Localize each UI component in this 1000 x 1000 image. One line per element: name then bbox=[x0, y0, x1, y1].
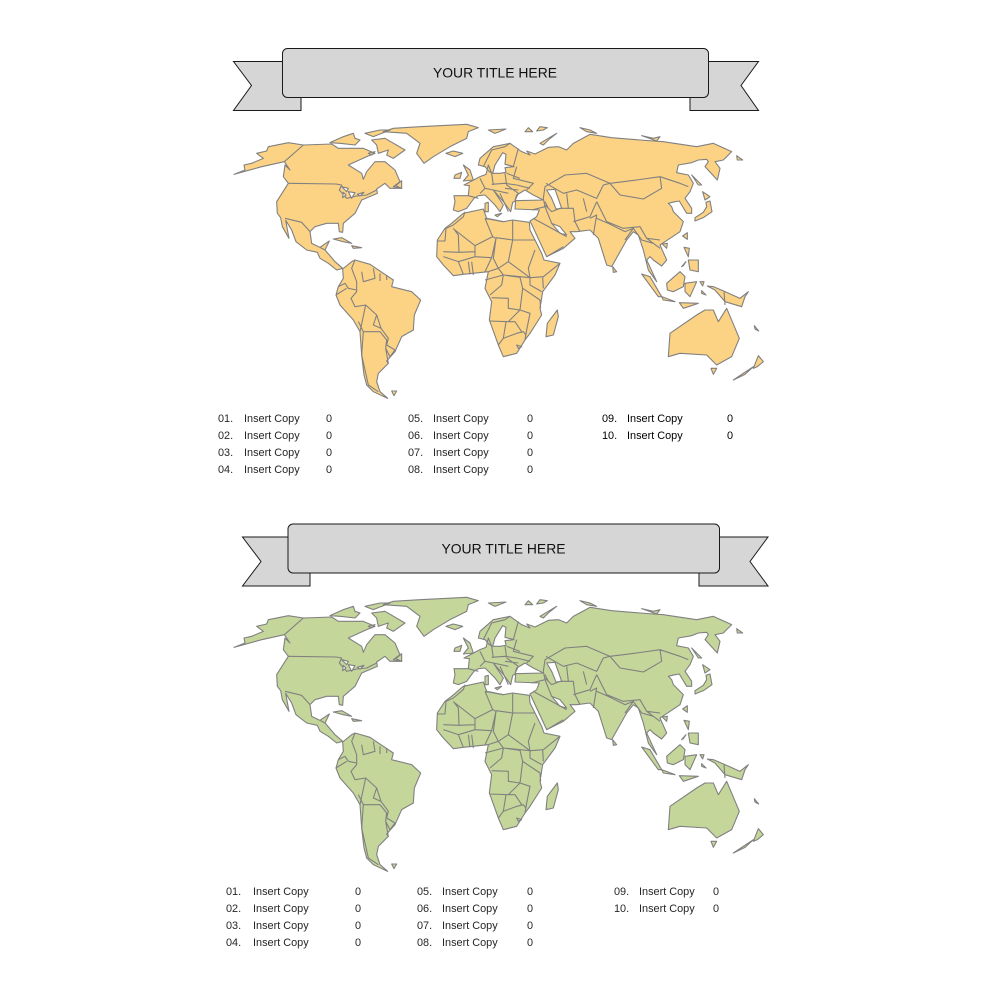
legend column 1: 01. bbox=[226, 886, 241, 898]
legend column 2 bbox=[417, 886, 533, 949]
legend column 3: 0 bbox=[727, 413, 733, 425]
legend column 1 bbox=[226, 886, 361, 949]
legend column 3: 09. bbox=[614, 886, 629, 898]
ribbon centre panel bbox=[282, 48, 708, 98]
legend column 1: 0 bbox=[355, 920, 361, 932]
legend column 2: 05. bbox=[417, 886, 432, 898]
legend column 2: 0 bbox=[527, 903, 533, 915]
legend column 2: Insert Copy bbox=[433, 430, 489, 442]
ribbon right tail bbox=[690, 62, 758, 110]
legend column 1: 0 bbox=[355, 886, 361, 898]
map: orange world map bbox=[234, 124, 763, 398]
legend column 2: 05. bbox=[408, 413, 423, 425]
legend column 1: 01. bbox=[218, 413, 233, 425]
legend column 1: Insert Copy bbox=[253, 903, 309, 915]
legend column 2: 0 bbox=[527, 937, 533, 949]
legend column 1: Insert Copy bbox=[253, 937, 309, 949]
legend column 2: 08. bbox=[408, 464, 423, 476]
legend column 3 bbox=[614, 886, 719, 915]
legend column 3 bbox=[602, 413, 733, 442]
legend column 3: 10. bbox=[614, 903, 629, 915]
legend column 2: 0 bbox=[527, 413, 533, 425]
legend column 3: Insert Copy bbox=[627, 413, 683, 425]
legend column 1: 03. bbox=[218, 447, 233, 459]
legend column 1: 03. bbox=[226, 920, 241, 932]
legend column 1: Insert Copy bbox=[244, 413, 300, 425]
legend column 1: Insert Copy bbox=[244, 464, 300, 476]
legend column 2: 07. bbox=[408, 447, 423, 459]
legend column 1: Insert Copy bbox=[244, 430, 300, 442]
legend column 1: 02. bbox=[226, 903, 241, 915]
legend column 3: 0 bbox=[727, 430, 733, 442]
legend: bottom map list bbox=[226, 886, 719, 949]
legend column 1: 0 bbox=[326, 413, 332, 425]
legend column 2: Insert Copy bbox=[442, 903, 498, 915]
legend column 2: 08. bbox=[417, 937, 432, 949]
legend column 3: Insert Copy bbox=[627, 430, 683, 442]
legend column 2: 0 bbox=[527, 430, 533, 442]
map: green world map bbox=[234, 597, 763, 871]
ribbon left tail bbox=[242, 537, 310, 586]
legend column 3: 10. bbox=[602, 430, 617, 442]
ribbon centre panel bbox=[288, 524, 720, 573]
legend column 2: 0 bbox=[527, 464, 533, 476]
legend column 1: Insert Copy bbox=[253, 886, 309, 898]
legend column 2: 0 bbox=[527, 447, 533, 459]
legend column 2: 06. bbox=[417, 903, 432, 915]
legend column 1: Insert Copy bbox=[253, 920, 309, 932]
title: YOUR TITLE HERE bbox=[441, 540, 566, 556]
legend column 1: 0 bbox=[355, 937, 361, 949]
banner: top title ribbon bbox=[234, 48, 758, 110]
legend column 2 bbox=[408, 413, 533, 476]
legend column 3: 0 bbox=[713, 886, 719, 898]
legend column 2: Insert Copy bbox=[442, 920, 498, 932]
legend column 3: Insert Copy bbox=[639, 886, 695, 898]
legend column 1: Insert Copy bbox=[244, 447, 300, 459]
legend column 2: 06. bbox=[408, 430, 423, 442]
legend column 1: 0 bbox=[326, 447, 332, 459]
legend column 1: 02. bbox=[218, 430, 233, 442]
legend column 2: Insert Copy bbox=[433, 464, 489, 476]
legend column 1: 04. bbox=[218, 464, 233, 476]
legend column 2: Insert Copy bbox=[433, 447, 489, 459]
legend column 1: 0 bbox=[326, 430, 332, 442]
banner: bottom title ribbon bbox=[242, 524, 768, 586]
legend column 2: Insert Copy bbox=[442, 886, 498, 898]
legend column 3: Insert Copy bbox=[639, 903, 695, 915]
legend column 1: 0 bbox=[326, 464, 332, 476]
legend: top map list bbox=[218, 413, 733, 476]
legend column 1: 0 bbox=[355, 903, 361, 915]
legend column 2: Insert Copy bbox=[433, 413, 489, 425]
legend column 2: 07. bbox=[417, 920, 432, 932]
legend column 2: 0 bbox=[527, 886, 533, 898]
legend column 3: 09. bbox=[602, 413, 617, 425]
legend column 1: 04. bbox=[226, 937, 241, 949]
ribbon right tail bbox=[699, 537, 768, 586]
legend column 3: 0 bbox=[713, 903, 719, 915]
legend column 2: 0 bbox=[527, 920, 533, 932]
ribbon left tail bbox=[234, 62, 301, 110]
legend column 1 bbox=[218, 413, 332, 476]
legend column 2: Insert Copy bbox=[442, 937, 498, 949]
title: YOUR TITLE HERE bbox=[433, 64, 557, 80]
